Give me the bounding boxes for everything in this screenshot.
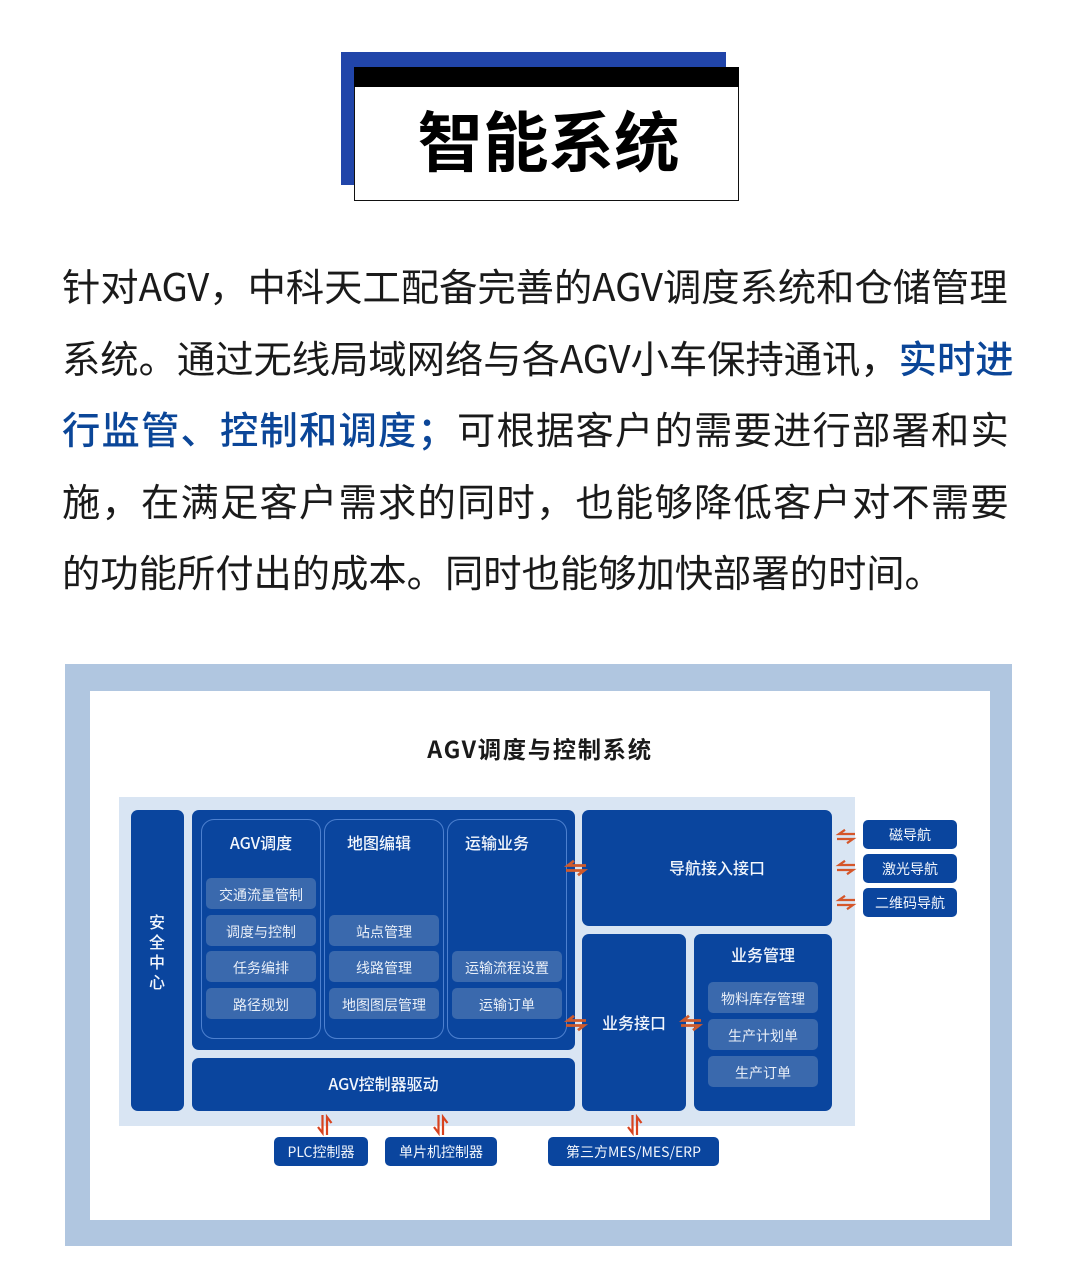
item: scheduling and control — [206, 915, 316, 946]
arrow: business interface to management — [679, 1014, 703, 1032]
item: traffic control — [206, 878, 316, 909]
item: task orchestration: 任务编排 — [233, 958, 289, 978]
title block — [341, 52, 739, 201]
item: path planning: 路径规划 — [233, 995, 289, 1015]
device: third-party MES/ERP: 第三方MES/MES/ERP — [566, 1142, 701, 1162]
device: PLC controller — [274, 1137, 368, 1166]
arrow: driver to MCU — [433, 1114, 448, 1136]
nav type: magnetic — [863, 820, 957, 849]
arrow: driver to PLC — [317, 1114, 332, 1136]
nav type: laser: 激光导航 — [882, 858, 938, 878]
item: route management — [329, 951, 439, 982]
item: transport process settings — [452, 951, 562, 982]
item: transport orders: 运输订单 — [479, 995, 535, 1015]
column: transport business — [447, 819, 567, 1039]
intro paragraph: 针对AGV，中科天工配备完善的AGV调度系统和仓储管理 — [62, 258, 1008, 313]
intro paragraph: 施，在满足客户需求的同时，也能够降低客户对不需要 — [62, 472, 1010, 528]
item: path planning — [206, 988, 316, 1019]
item: route management: 线路管理 — [356, 958, 412, 978]
heading: AGV dispatch: AGV调度 — [230, 830, 292, 854]
item: scheduling and control: 调度与控制 — [226, 922, 296, 942]
item: station management — [329, 915, 439, 946]
nav type: laser — [863, 854, 957, 883]
intro paragraph: 行监管、控制和调度；可根据客户的需要进行部署和实 — [62, 401, 1010, 456]
title black bar — [354, 67, 739, 87]
business interface block — [582, 934, 686, 1111]
heading: business management: 业务管理 — [731, 942, 795, 966]
item: station management: 站点管理 — [356, 922, 412, 942]
device: third-party MES/ERP — [548, 1137, 719, 1166]
AGV controller driver block — [192, 1058, 575, 1111]
item: material inventory — [708, 982, 818, 1013]
diagram outer frame — [65, 664, 1012, 1246]
column: AGV dispatch — [201, 819, 321, 1039]
item: task orchestration — [206, 951, 316, 982]
navigation interface block — [582, 810, 832, 926]
column: map editing — [324, 819, 444, 1039]
arrow: QR navigation — [836, 894, 856, 910]
title white card — [354, 67, 739, 201]
security centre block — [131, 810, 184, 1111]
device: PLC controller: PLC控制器 — [288, 1142, 354, 1162]
item: transport process settings: 运输流程设置 — [465, 958, 549, 978]
security centre block: 安全中心 — [149, 909, 165, 993]
diagram title: AGV调度与控制系统 — [427, 731, 653, 765]
item: map layer management — [329, 988, 439, 1019]
title text: 智能系统 — [417, 90, 680, 185]
diagram white card — [90, 691, 990, 1220]
main scheduling panel — [192, 810, 575, 1050]
heading: map editing: 地图编辑 — [347, 830, 411, 854]
nav type: QR code: 二维码导航 — [875, 892, 945, 912]
device: MCU controller — [385, 1137, 497, 1166]
arrow: laser navigation — [836, 860, 856, 876]
title blue offset panel — [341, 52, 726, 185]
item: map layer management: 地图图层管理 — [342, 995, 426, 1015]
item: transport orders — [452, 988, 562, 1019]
arrow: main to navigation interface — [564, 860, 588, 876]
intro paragraph — [62, 258, 1014, 599]
item: material inventory: 物料库存管理 — [721, 989, 805, 1009]
business management panel — [694, 934, 832, 1111]
business interface block: 业务接口 — [602, 1010, 666, 1034]
item: production plan: 生产计划单 — [728, 1026, 798, 1046]
diagram light background — [119, 797, 855, 1126]
item: production order — [708, 1056, 818, 1087]
nav type: magnetic: 磁导航 — [889, 825, 931, 845]
item: traffic control: 交通流量管制 — [219, 885, 303, 905]
arrow: main to business interface — [564, 1014, 588, 1032]
arrow: magnetic navigation — [836, 828, 856, 844]
item: production order: 生产订单 — [735, 1063, 791, 1083]
AGV controller driver block: AGV控制器驱动 — [328, 1071, 439, 1095]
nav type: QR code — [863, 888, 957, 917]
heading: transport business: 运输业务 — [465, 830, 529, 854]
intro paragraph: 系统。通过无线局域网络与各AGV小车保持通讯，实时进 — [62, 330, 1014, 384]
device: MCU controller: 单片机控制器 — [399, 1142, 483, 1162]
intro paragraph: 的功能所付出的成本。同时也能够加快部署的时间。 — [62, 544, 943, 599]
item: production plan — [708, 1019, 818, 1050]
arrow: business interface to MES — [627, 1114, 642, 1136]
navigation interface block: 导航接入接口 — [669, 855, 765, 879]
